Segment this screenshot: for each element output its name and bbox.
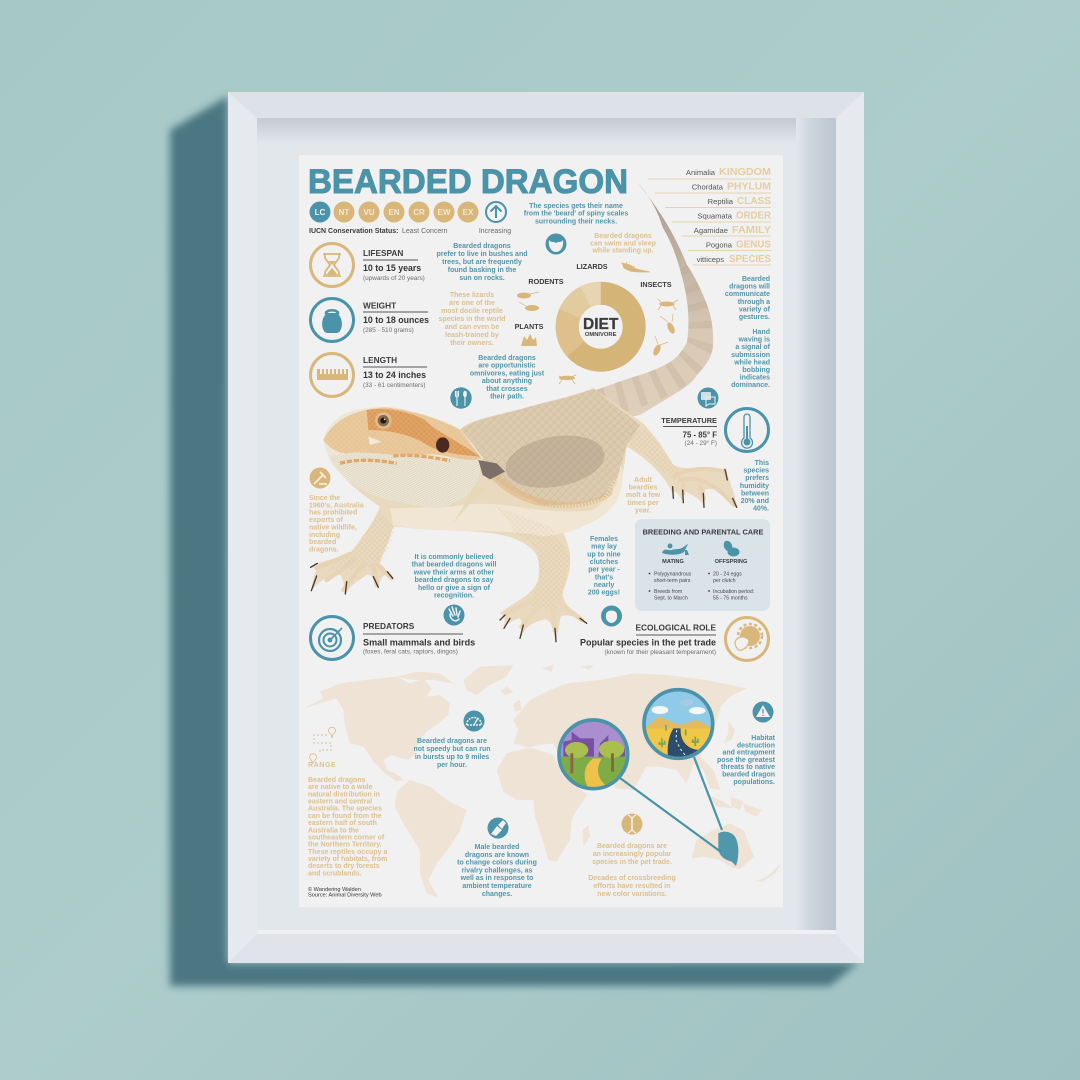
export ban icon bbox=[310, 468, 330, 488]
swimming fact: Bearded dragons bbox=[594, 233, 652, 240]
humidity fact: 40%. bbox=[753, 506, 769, 513]
docile fact: most docile reptile bbox=[441, 308, 503, 315]
IUCN conservation status row: Least Concern bbox=[402, 228, 448, 235]
export ban fact: bearded bbox=[309, 539, 336, 546]
clutches fact: 200 eggs! bbox=[588, 590, 620, 597]
color change fact: rivalry challenges, as bbox=[462, 867, 533, 874]
color change fact: to change colors during bbox=[457, 860, 537, 867]
source credit: Source: Animal Diversity Web bbox=[308, 892, 382, 898]
predators stat: PREDATORS bbox=[363, 621, 415, 631]
icon: offspring eggs bbox=[722, 539, 740, 556]
range description: eastern half of south bbox=[308, 820, 377, 827]
name origin fact: from the 'beard' of spiny scales bbox=[524, 211, 628, 218]
range description: Australia. The species bbox=[308, 806, 382, 813]
export ban fact: Since the bbox=[309, 495, 340, 502]
lifespan stat: (upwards of 20 years) bbox=[363, 275, 425, 282]
weight stat bbox=[310, 298, 429, 342]
docile fact: leash-trained by bbox=[445, 332, 499, 339]
population trend arrow: Increasing bbox=[479, 228, 511, 235]
taxonomy table bbox=[648, 166, 771, 265]
diet chart: DIET bbox=[583, 316, 619, 333]
communication fact: Bearded bbox=[742, 276, 770, 283]
pet trade fact: species in the pet trade. bbox=[592, 859, 672, 866]
omnivore fact: are opportunistic bbox=[478, 363, 536, 370]
color change fact: Male bearded bbox=[475, 844, 519, 851]
clutches fact: up to nine bbox=[587, 551, 621, 558]
gesture fact: indicates bbox=[740, 375, 770, 382]
length stat bbox=[310, 354, 427, 396]
gesture fact: waving is bbox=[737, 337, 770, 344]
name origin fact: The species gets their name bbox=[529, 203, 623, 210]
swimming fact: while standing up. bbox=[591, 248, 654, 255]
gesture fact: a signal of bbox=[735, 344, 771, 351]
clutches fact: Females bbox=[590, 536, 618, 543]
pet trade fact: Decades of crossbreeding bbox=[588, 875, 676, 882]
world map bbox=[303, 665, 782, 897]
taxonomy table: CLASS bbox=[737, 195, 771, 207]
diet chart bbox=[567, 293, 634, 360]
threats fact: bearded dragon bbox=[722, 772, 775, 778]
icon: chat bubbles bbox=[698, 388, 718, 408]
export ban fact: exports of bbox=[309, 517, 344, 524]
threats fact: populations. bbox=[733, 779, 775, 786]
mating list: Polygynandrous bbox=[654, 572, 692, 578]
predators stat bbox=[310, 616, 475, 660]
IUCN conservation status row: LC bbox=[315, 208, 326, 217]
taxonomy table: vitticeps bbox=[697, 255, 724, 264]
population trend arrow bbox=[479, 202, 511, 235]
icon: waving hand bbox=[444, 604, 464, 626]
omnivore fact: about anything bbox=[482, 378, 532, 385]
habitat fact: found basking in the bbox=[448, 267, 516, 274]
speed fact: in bursts up to 9 miles bbox=[415, 754, 489, 761]
taxonomy table: KINGDOM bbox=[719, 166, 771, 178]
IUCN conservation status row: EX bbox=[463, 208, 474, 217]
omnivore fact: their path. bbox=[490, 394, 524, 400]
communication fact: communicate bbox=[725, 291, 770, 298]
range description: and scrublands. bbox=[308, 870, 362, 877]
range description: Bearded dragons bbox=[308, 777, 366, 784]
humidity fact: between bbox=[741, 490, 769, 497]
lifespan stat: LIFESPAN bbox=[363, 248, 403, 258]
diet chart: OMNIVORE bbox=[585, 332, 617, 338]
taxonomy table: ORDER bbox=[736, 210, 771, 222]
ecological role stat bbox=[580, 618, 768, 660]
mating list bbox=[649, 572, 692, 602]
mating list: Sept. to March bbox=[654, 596, 688, 602]
molting fact: year. bbox=[635, 507, 651, 514]
export ban fact: has prohibited bbox=[309, 510, 357, 517]
arm waving fact: hello or give a sign of bbox=[418, 585, 491, 592]
molting fact: Adult bbox=[634, 477, 653, 484]
lifespan stat bbox=[310, 244, 425, 286]
taxonomy table: Animalia bbox=[686, 168, 716, 177]
title: BEARDED DRAGON bbox=[308, 163, 628, 201]
clutches fact: may lay bbox=[591, 544, 617, 551]
molting fact: molt a few bbox=[626, 492, 661, 499]
diet labels: INSECTS bbox=[640, 280, 672, 289]
color change fact: ambient temperature bbox=[462, 883, 532, 890]
poster sheet bbox=[299, 155, 783, 907]
icon: beard bbox=[546, 234, 566, 254]
panel: breeding and parental care bbox=[635, 519, 770, 611]
docile fact: and can even be bbox=[445, 324, 499, 331]
offspring list bbox=[708, 572, 754, 602]
IUCN conservation status row bbox=[309, 202, 478, 235]
range description: eastern and central bbox=[308, 799, 372, 806]
gesture fact: dominance. bbox=[731, 382, 770, 389]
diet labels: LIZARDS bbox=[576, 262, 608, 271]
arm waving fact: recognition. bbox=[434, 592, 474, 600]
clutches fact: per year - bbox=[588, 567, 620, 574]
icon: paint brush bbox=[488, 818, 508, 838]
mating list: short-term pairs bbox=[654, 578, 691, 584]
habitat fact: prefer to live in bushes and bbox=[436, 251, 528, 258]
taxonomy table: Reptilia bbox=[708, 197, 734, 206]
taxonomy table: Pogona bbox=[706, 240, 733, 250]
frame shadow bbox=[170, 96, 858, 986]
habitat fact: trees, but are frequently bbox=[442, 259, 522, 266]
communication fact: gestures. bbox=[739, 314, 770, 321]
lifespan stat: 10 to 15 years bbox=[363, 263, 421, 273]
arm waving fact: wave their arms at other bbox=[413, 569, 495, 576]
clutches fact: nearly bbox=[594, 582, 614, 589]
IUCN conservation status row: EN bbox=[388, 208, 400, 217]
ecological role stat: (known for their pleasant temperament) bbox=[604, 649, 716, 656]
speed fact: not speedy but can run bbox=[413, 746, 491, 753]
habitat fact: sun on rocks. bbox=[459, 275, 505, 282]
weight stat: WEIGHT bbox=[363, 300, 396, 310]
color change fact: dragons are known bbox=[465, 852, 529, 859]
taxonomy table: SPECIES bbox=[729, 253, 771, 265]
diet labels: RODENTS bbox=[528, 277, 564, 286]
speed fact: Bearded dragons are bbox=[417, 738, 487, 745]
IUCN conservation status row: VU bbox=[363, 208, 375, 217]
IUCN conservation status row: IUCN Conservation Status: bbox=[309, 228, 398, 235]
export ban fact: native wildlife, bbox=[309, 524, 357, 531]
weight stat: 10 to 18 ounces bbox=[363, 315, 429, 325]
docile fact: are one of the bbox=[449, 300, 495, 307]
taxonomy table: GENUS bbox=[736, 238, 771, 250]
range description: Australia to the bbox=[308, 827, 359, 834]
offspring list: Incubation period: bbox=[713, 589, 754, 595]
speed fact: per hour. bbox=[437, 762, 467, 769]
humidity fact: species bbox=[743, 468, 769, 475]
panel: breeding and parental care: OFFSPRING bbox=[715, 559, 747, 565]
swimming fact: can swim and sleep bbox=[590, 240, 656, 247]
temperature stat: (24 - 29° F) bbox=[685, 439, 717, 447]
threats fact: pose the greatest bbox=[717, 757, 776, 764]
taxonomy table: PHYLUM bbox=[727, 180, 771, 192]
docile fact: their owners. bbox=[450, 340, 494, 347]
ecological role stat: Popular species in the pet trade bbox=[580, 638, 716, 648]
range description: the Northern Territory. bbox=[308, 842, 382, 849]
export ban fact: including bbox=[309, 532, 340, 539]
scene: desert road habitat bbox=[643, 690, 713, 760]
taxonomy table: Chordata bbox=[692, 182, 724, 192]
diet labels bbox=[515, 262, 672, 331]
taxonomy table: Squamata bbox=[697, 212, 733, 220]
length stat: 13 to 24 inches bbox=[363, 370, 426, 380]
length stat: LENGTH bbox=[363, 355, 397, 365]
gesture fact: submission bbox=[731, 352, 770, 359]
gesture fact: Hand bbox=[752, 329, 770, 336]
predators stat: (foxes, feral cats, raptors, dingos) bbox=[363, 648, 458, 656]
IUCN conservation status row: NT bbox=[339, 208, 349, 217]
molting fact: times per bbox=[627, 500, 659, 507]
range heading: RANGE bbox=[308, 762, 336, 769]
gesture fact: while head bbox=[733, 359, 770, 366]
docile fact: species in the world bbox=[439, 316, 505, 323]
source credit: © Wandering Walden bbox=[308, 886, 361, 893]
color change fact: changes. bbox=[482, 891, 512, 898]
clutches fact: that's bbox=[595, 574, 613, 581]
offspring list: per clutch bbox=[713, 578, 736, 584]
picture frame bbox=[228, 92, 864, 963]
range description: southeastern corner of bbox=[308, 834, 385, 841]
IUCN conservation status row: CR bbox=[413, 208, 425, 217]
lizard body bbox=[311, 388, 737, 642]
color change fact: well as in response to bbox=[460, 875, 533, 882]
offspring list: 55 - 75 months bbox=[713, 596, 748, 602]
threats fact: threats to native bbox=[721, 764, 775, 771]
icon: mating bbox=[662, 544, 689, 555]
gesture fact: bobbing bbox=[742, 367, 770, 374]
pet trade fact: efforts have resulted in bbox=[593, 883, 671, 890]
scene: woodland habitat bbox=[558, 720, 628, 790]
predators stat: Small mammals and birds bbox=[363, 638, 475, 648]
range description: These reptiles occupy a bbox=[308, 849, 387, 856]
lizard tail bbox=[596, 184, 714, 416]
export ban fact: dragons. bbox=[309, 546, 339, 553]
export ban fact: 1960's, Australia bbox=[309, 502, 364, 509]
humidity fact: 20% and bbox=[741, 498, 769, 505]
length stat: (33 - 61 centimenters) bbox=[363, 382, 426, 389]
omnivore fact: Bearded dragons bbox=[478, 355, 536, 362]
range description: are native to a wide bbox=[308, 784, 373, 791]
callout lines to Australia bbox=[620, 757, 722, 852]
docile fact: These lizards bbox=[450, 292, 494, 299]
arm waving fact: bearded dragons to say bbox=[415, 577, 494, 584]
taxonomy table: Agamidae bbox=[694, 226, 728, 235]
IUCN conservation status row: EW bbox=[438, 208, 451, 217]
humidity fact: This bbox=[755, 460, 769, 467]
diet labels: PLANTS bbox=[515, 322, 544, 331]
range icon bbox=[310, 727, 336, 763]
temperature stat: TEMPERATURE bbox=[661, 416, 717, 425]
humidity fact: prefers bbox=[745, 475, 769, 482]
panel: breeding and parental care: MATING bbox=[662, 559, 684, 565]
icon: DNA bbox=[622, 814, 642, 834]
taxonomy table: FAMILY bbox=[732, 224, 771, 236]
communication fact: dragons will bbox=[729, 284, 770, 291]
pet trade fact: an increasingly popular bbox=[593, 851, 672, 858]
arm waving fact: It is commonly believed bbox=[415, 554, 493, 561]
omnivore fact: omnivores, eating just bbox=[470, 370, 545, 377]
temperature stat bbox=[661, 408, 768, 452]
range description: variety of habitats, from bbox=[308, 856, 387, 863]
diet icons bbox=[517, 262, 678, 384]
pet trade fact: new color variations. bbox=[597, 891, 667, 898]
range description: deserts to dry forests bbox=[308, 863, 380, 870]
panel: breeding and parental care: BREEDING AND PARENTAL CARE bbox=[643, 528, 763, 536]
mating list: Breeds from bbox=[654, 589, 682, 595]
temperature stat: 75 - 85° F bbox=[683, 430, 717, 440]
icon: speedometer bbox=[464, 710, 484, 732]
range description: can be found from the bbox=[308, 813, 382, 820]
habitat fact: Bearded dragons bbox=[453, 243, 511, 250]
clutches fact: clutches bbox=[590, 559, 618, 566]
humidity fact: humidity bbox=[740, 483, 769, 490]
offspring list: 20 - 24 eggs bbox=[713, 572, 742, 578]
threats fact: destruction bbox=[737, 742, 775, 749]
communication fact: through a bbox=[738, 299, 770, 306]
weight stat: (285 - 510 grams) bbox=[363, 327, 414, 334]
threats fact: and entrapment bbox=[722, 750, 776, 757]
threats fact: Habitat bbox=[751, 735, 776, 742]
ecological role stat: ECOLOGICAL ROLE bbox=[635, 622, 716, 632]
pet trade fact: Bearded dragons are bbox=[597, 843, 667, 850]
name origin fact: surrounding their necks. bbox=[535, 218, 617, 225]
range description: natural distribution in bbox=[308, 791, 380, 798]
communication fact: variety of bbox=[739, 306, 771, 313]
molting fact: beardies bbox=[629, 485, 658, 492]
icon: fork and spoon bbox=[450, 387, 472, 409]
icon: warning bbox=[752, 702, 774, 722]
arm waving fact: that bearded dragons will bbox=[412, 562, 496, 569]
omnivore fact: that crosses bbox=[486, 386, 528, 393]
icon: hatching egg bbox=[601, 606, 622, 626]
